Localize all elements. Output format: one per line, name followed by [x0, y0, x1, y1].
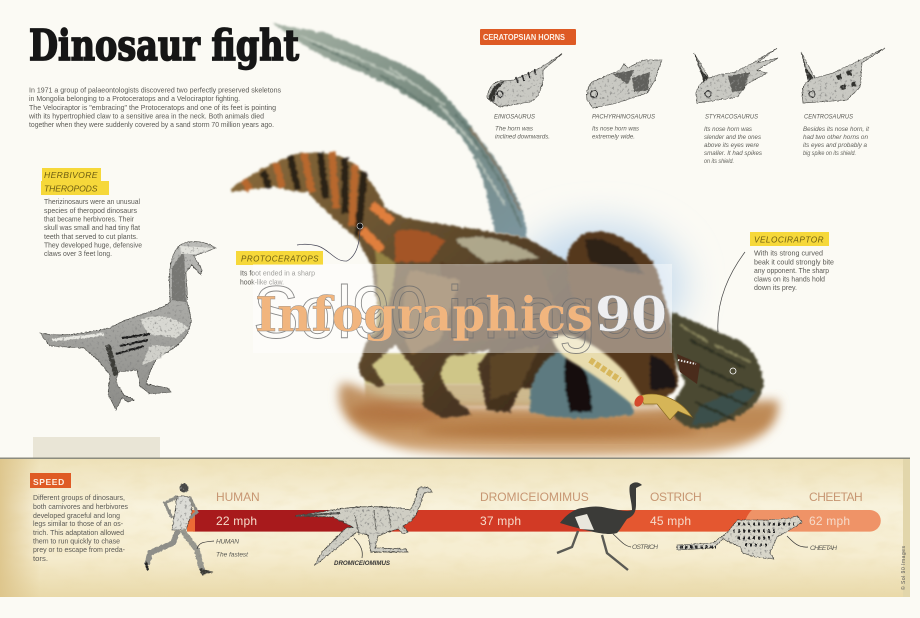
callout: protoceratops: Its foot ended in a sharp: [240, 268, 315, 278]
protoceratops frill and head: [567, 232, 678, 400]
text: pachyrhinosaurus: Its nose horn was: [592, 126, 639, 132]
speed heading: [30, 473, 71, 488]
speed labels: 45 mph: [650, 514, 691, 528]
text: einiosaurus: inclined downwards.: [495, 134, 550, 141]
speed bar: [187, 510, 881, 532]
skull: einiosaurus: [487, 54, 562, 107]
speed text: prey or to escape from preda-: [33, 545, 126, 554]
text: therizinosaurs: that became herbivores. Their: [44, 214, 135, 224]
label: herbivore theropods: [41, 168, 109, 195]
text: einiosaurus: The horn was: [495, 126, 533, 132]
callout: protoceratops: hook-like claw.: [240, 278, 284, 286]
text: pachyrhinosaurus: PACHYRHINOSAURUS: [592, 114, 656, 120]
intro text: with its hypertrophied claw to a sensitive area in the neck. Both animals died: [28, 112, 264, 120]
text: styracosaurus: on its shield.: [704, 158, 734, 165]
callout: protoceratops: [236, 223, 363, 286]
speed text: legs similar to those of an os-: [33, 519, 124, 528]
callout: velociraptor: claws on its hands hold: [754, 274, 825, 284]
text: styracosaurus: above its eyes were: [704, 142, 760, 149]
text: therizinosaurs: claws over 3 feet long.: [44, 249, 112, 258]
intro text: in Mongolia belonging to a Protoceratops and a Velociraptor fighting.: [29, 94, 240, 103]
callout: velociraptor: With its strong curved: [754, 248, 823, 258]
text: centrosaurus: CENTROSAURUS: [804, 114, 854, 120]
speed labels: 22 mph: [216, 514, 257, 528]
velociraptor feathered tail: [272, 23, 527, 238]
text: styracosaurus: smaller. It had spikes: [704, 150, 762, 157]
velociraptor head and feathers: [670, 312, 763, 429]
text: centrosaurus: its eyes and probably a: [803, 142, 868, 149]
skull: pachyrhinosaurus: [587, 60, 662, 108]
watermark: 90: [595, 287, 667, 343]
text: styracosaurus: [704, 114, 762, 165]
intro text: The Velociraptor is "embracing" the Protoceratops and one of its feet is pointing: [29, 103, 276, 112]
callout: velociraptor: any opponent. The sharp: [754, 266, 829, 275]
label: ceratopsian horns: [480, 29, 576, 45]
text: therizinosaurs: species of theropod dinosaurs: [44, 206, 137, 215]
velociraptor lower body: [530, 352, 634, 418]
figure: cheetah: [677, 516, 802, 559]
sand ground: [339, 383, 778, 457]
text: styracosaurus: STYRACOSAURUS: [705, 114, 759, 120]
callout: velociraptor: beak it could strongly bite: [754, 257, 834, 266]
text: einiosaurus: [494, 114, 550, 141]
speed labels: CHEETAH: [809, 490, 863, 504]
intro text: together when they were suddenly covered by a sand storm 70 million years ago.: [29, 120, 274, 129]
sky backdrop: [515, 223, 685, 347]
text: pachyrhinosaurus: extremely wide.: [592, 134, 635, 141]
text: styracosaurus: Its nose horn was: [704, 126, 752, 133]
ostrich caption: OSTRICH: [632, 544, 658, 551]
text: therizinosaurs: Therizinosaurs were an unusual: [44, 197, 140, 206]
cheetah caption: [787, 536, 837, 552]
savanna backdrop: [365, 353, 665, 406]
text: styracosaurus: slender and the ones: [704, 134, 761, 141]
speed labels: [216, 490, 863, 528]
tape strip: [33, 437, 160, 459]
intro text: In 1971 a group of palaeontologists discovered two perfectly preserved skeletons: [29, 86, 281, 94]
callout: protoceratops: PROTOCERATOPS: [241, 254, 319, 264]
watermark: Sol90 images: [253, 271, 668, 354]
text: therizinosaurs: skull was small and had tiny flat: [44, 223, 140, 232]
figure: dromiceiomimus: [295, 487, 432, 566]
speed text: developed graceful and long: [33, 511, 120, 520]
speed text: them to run quickly to chase: [33, 536, 120, 546]
illustration: therizinosaur: [40, 242, 216, 410]
dromiceiomimus caption: [334, 538, 391, 567]
text: centrosaurus: had two other horns on: [803, 134, 869, 141]
text: centrosaurus: Besides its nose horn, it: [803, 126, 869, 133]
text: centrosaurus: [803, 114, 869, 157]
speed heading: SPEED: [33, 477, 65, 487]
human caption: The fastest: [216, 552, 249, 558]
panel: speed: [0, 458, 910, 597]
callout: velociraptor: VELOCIRAPTOR: [754, 234, 824, 244]
label: ceratopsian horns: CERATOPSIAN HORNS: [483, 33, 566, 42]
figure: human runner: [145, 484, 214, 575]
velociraptor arm and claws: [552, 335, 692, 420]
credit: © Sol 90 Images: [900, 546, 907, 590]
label: herbivore theropods: THEROPODS: [44, 184, 98, 194]
speed labels: OSTRICH: [650, 490, 702, 504]
speed labels: DROMICEIOMIMUS: [480, 490, 589, 504]
dromiceiomimus caption: DROMICEIOMIMUS: [334, 560, 391, 567]
speed labels: 37 mph: [480, 514, 521, 528]
text: therizinosaurs: [44, 197, 142, 258]
speed labels: 62 mph: [809, 514, 850, 528]
main illustration: dinosaur fight: [232, 23, 778, 457]
speed text: both carnivores and herbivores: [33, 502, 128, 511]
text: pachyrhinosaurus: [592, 114, 656, 141]
text: centrosaurus: big spike on its shield.: [803, 150, 856, 157]
protoceratops body and tail: [232, 152, 610, 418]
text: therizinosaurs: They developed huge, defensive: [44, 240, 142, 250]
speed labels: HUMAN: [216, 490, 260, 504]
human caption: HUMAN: [216, 538, 239, 546]
callout: velociraptor: down its prey.: [754, 283, 797, 292]
text: therizinosaurs: teeth that served to cut plants.: [44, 232, 138, 241]
text: einiosaurus: EINIOSAURUS: [494, 114, 536, 120]
speed text: Different groups of dinosaurs,: [33, 493, 125, 502]
label: herbivore theropods: HERBIVORE: [44, 170, 98, 180]
skull: styracosaurus: [694, 48, 778, 103]
speed text: [33, 493, 128, 563]
speed text: tors.: [33, 554, 48, 563]
watermark: Infographics: [255, 287, 593, 343]
figure: ostrich: [557, 482, 642, 570]
title: Dinosaur fight: [29, 21, 299, 70]
human caption: [197, 538, 249, 558]
ostrich caption: [613, 534, 658, 551]
speed text: trich. This adaptation allowed: [33, 528, 124, 537]
band background: [0, 458, 910, 597]
skull: centrosaurus: [801, 48, 885, 103]
intro text: [28, 86, 281, 129]
cheetah caption: CHEETAH: [810, 545, 837, 552]
callout: velociraptor: [718, 232, 834, 374]
